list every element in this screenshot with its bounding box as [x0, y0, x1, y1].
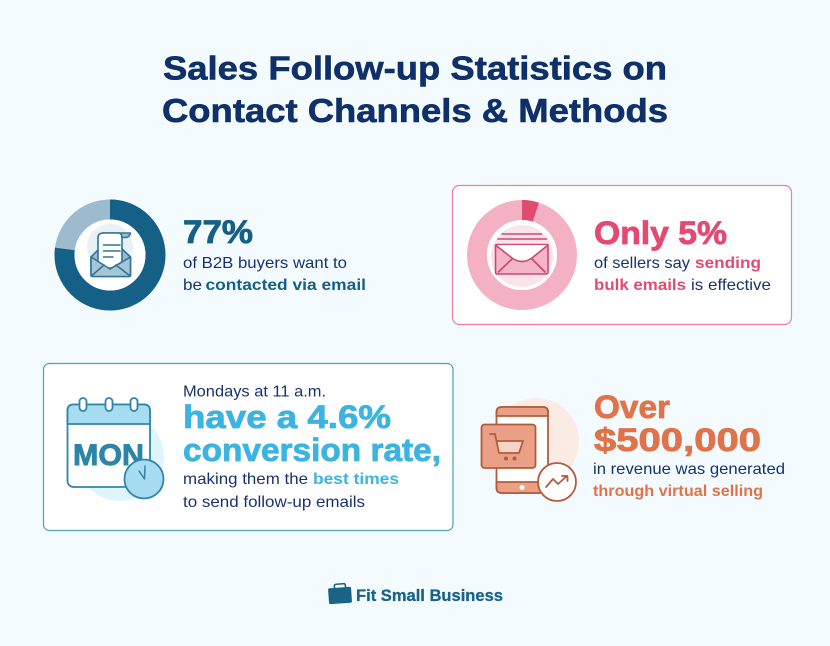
- icon: bulk envelopes: [491, 225, 553, 287]
- title: Sales Follow-up Statistics on: [163, 50, 667, 86]
- description: [183, 471, 399, 511]
- statistic: 77%: 77%: [183, 214, 253, 250]
- donut chart: 77 percent: [64, 210, 156, 300]
- icon: phone with shopping cart and growth chart: [482, 398, 579, 501]
- description: to send follow-up emails: [183, 494, 365, 511]
- description: contacted via email: [206, 277, 366, 294]
- description: [183, 255, 366, 294]
- description: best times: [313, 471, 399, 488]
- description: in revenue was generated: [593, 461, 785, 478]
- icon: calendar with clock: [68, 398, 164, 501]
- description: sending: [695, 255, 761, 272]
- description: of B2B buyers want to: [183, 255, 347, 272]
- title: [162, 50, 668, 129]
- description: making them the: [183, 471, 308, 488]
- description: be: [183, 277, 202, 294]
- icon: briefcase: [328, 583, 352, 604]
- description: through virtual selling: [593, 483, 763, 500]
- description: [593, 461, 785, 500]
- statistic: Only 5%: Only 5%: [594, 215, 727, 251]
- panel: bulk email statistic: [452, 186, 792, 324]
- logo: Fit Small Business: Fit Small Business: [356, 586, 503, 605]
- icon: calendar with clock: MON: [73, 439, 144, 472]
- description: of sellers say: [594, 255, 690, 272]
- description: bulk emails: [594, 277, 686, 294]
- statistic: over $500,000: [594, 389, 761, 458]
- statistic: over $500,000: $500,000: [594, 422, 761, 458]
- description: [594, 255, 771, 294]
- panel: Monday conversion statistic: [44, 364, 453, 530]
- statistic: 4.6% conversion rate: conversion rate,: [183, 432, 441, 468]
- statistic: 4.6% conversion rate: [183, 399, 441, 468]
- statistic: 4.6% conversion rate: have a 4.6%: [183, 399, 391, 435]
- donut chart: 5 percent: [477, 210, 567, 300]
- text: lead-in: Mondays at 11 a.m.: [183, 384, 326, 401]
- statistic: over $500,000: Over: [594, 389, 670, 425]
- icon: open envelope with letter: [87, 224, 133, 276]
- description: is effective: [691, 277, 771, 294]
- panel: email preference statistic: [64, 210, 366, 300]
- title: Contact Channels & Methods: [162, 92, 668, 129]
- panel: virtual selling statistic: [482, 389, 785, 501]
